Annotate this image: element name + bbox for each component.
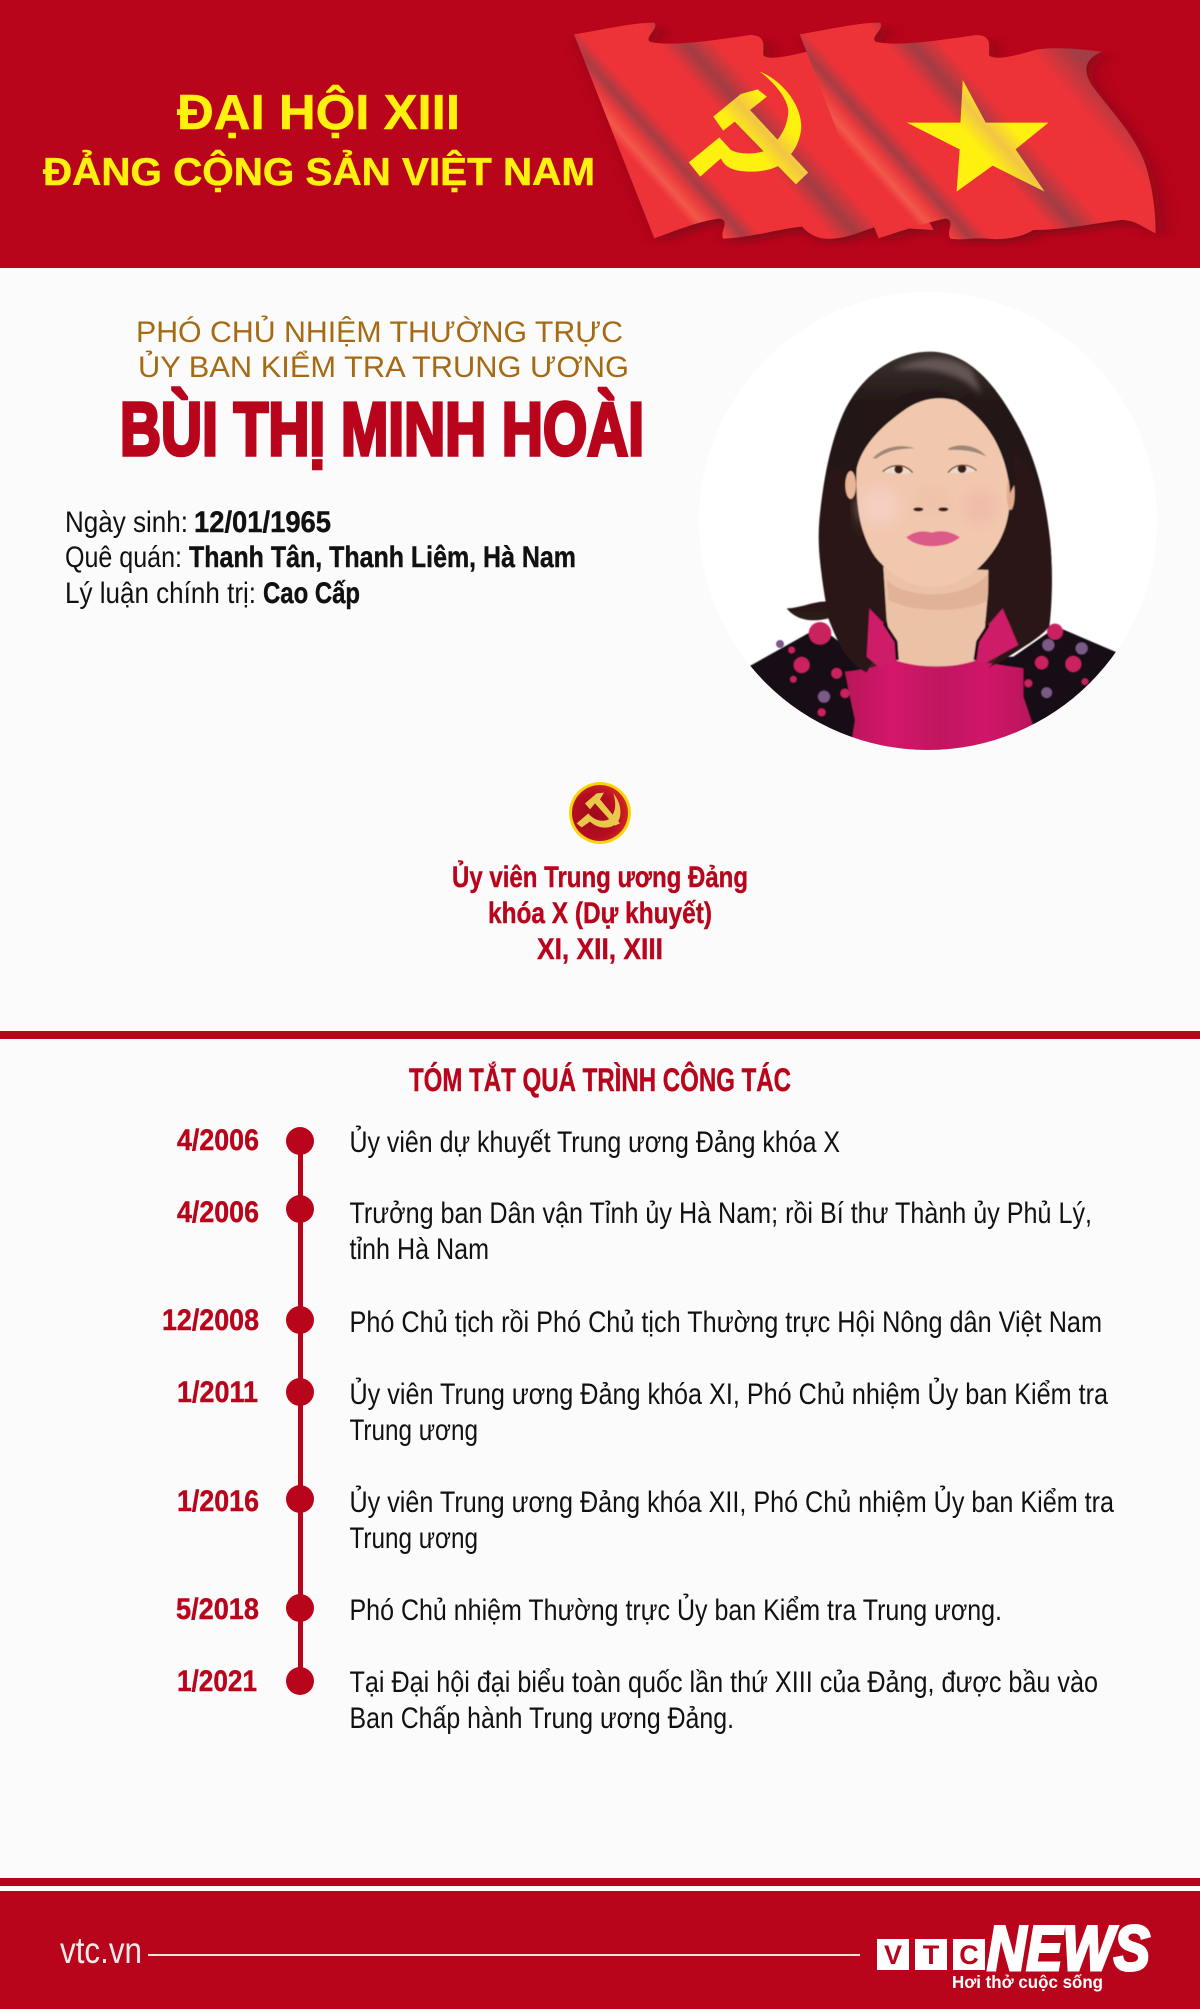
party emblem [569,782,631,844]
icon: yellow star [907,80,1048,192]
membership note: khóa X (Dự khuyết) [488,897,712,930]
logo: VTC News: C [959,1940,979,1970]
entry 12/2008 [162,1304,1102,1339]
role subtitle [136,315,629,384]
header banner [0,0,1200,268]
personal info: Lý luận chính trị: [65,577,256,610]
timeline heading: TÓM TẮT QUÁ TRÌNH CÔNG TÁC [409,1062,791,1098]
logo: VTC News [877,1914,1150,1992]
flags: party flag and national flag [574,23,1162,244]
logo: VTC News: V [884,1940,902,1970]
personal info: 12/01/1965 [194,506,331,539]
entry 5/2018: 5/2018 [176,1593,259,1626]
entry 1/2016: Trung ương [350,1522,478,1555]
entry 4/2006 first: 4/2006 [177,1124,259,1157]
entry 1/2016 [177,1485,1114,1555]
header title [43,85,595,194]
logo: VTC News: T [923,1940,940,1970]
entry 1/2021: Ban Chấp hành Trung ương Đảng. [350,1702,734,1735]
footer [0,1891,1200,2009]
entry 12/2008: 12/2008 [162,1304,259,1337]
entry 1/2011 [177,1376,1108,1447]
membership note: Ủy viên Trung ương Đảng [452,860,748,894]
entry 5/2018: Phó Chủ nhiệm Thường trực Ủy ban Kiểm tra Trung ương. [350,1593,1002,1627]
personal info: Cao Cấp [263,577,360,610]
header title: ĐẢNG CỘNG SẢN VIỆT NAM [43,149,595,194]
entry 4/2006 first: Ủy viên dự khuyết Trung ương Đảng khóa X [350,1125,840,1159]
portrait photo [750,350,1116,750]
entry 1/2011: 1/2011 [177,1376,258,1409]
logo: VTC News: Hơi thở cuộc sống [952,1972,1103,1992]
role subtitle: PHÓ CHỦ NHIỆM THƯỜNG TRỰC [136,315,623,349]
timeline axis [298,1141,303,1681]
entry 5/2018 [176,1593,1002,1627]
personal info: Ngày sinh: [65,506,188,539]
name heading: BÙI THỊ MINH HOÀI [120,387,644,471]
entry 4/2006 second: tỉnh Hà Nam [350,1233,489,1266]
membership note [452,860,748,966]
entry 4/2006 second: 4/2006 [177,1196,259,1229]
entry 1/2011: Trung ương [350,1414,478,1447]
membership note: XI, XII, XIII [537,933,663,966]
role subtitle: ỦY BAN KIỂM TRA TRUNG ƯƠNG [138,350,629,384]
header title: ĐẠI HỘI XIII [177,85,460,140]
personal info: Thanh Tân, Thanh Liêm, Hà Nam [189,541,576,574]
personal info: Quê quán: [65,541,182,574]
entry 1/2021 [177,1665,1098,1735]
personal info [65,506,576,610]
entry 1/2016: 1/2016 [177,1485,259,1518]
site url: vtc.vn [60,1930,142,1971]
timeline [162,1124,1114,1735]
entry 4/2006 first [177,1124,840,1159]
entry 1/2021: 1/2021 [177,1665,257,1698]
entry 4/2006 second [177,1195,1092,1266]
icon: hammer and sickle [689,72,808,184]
logo: VTC News: NEWS [987,1914,1150,1984]
